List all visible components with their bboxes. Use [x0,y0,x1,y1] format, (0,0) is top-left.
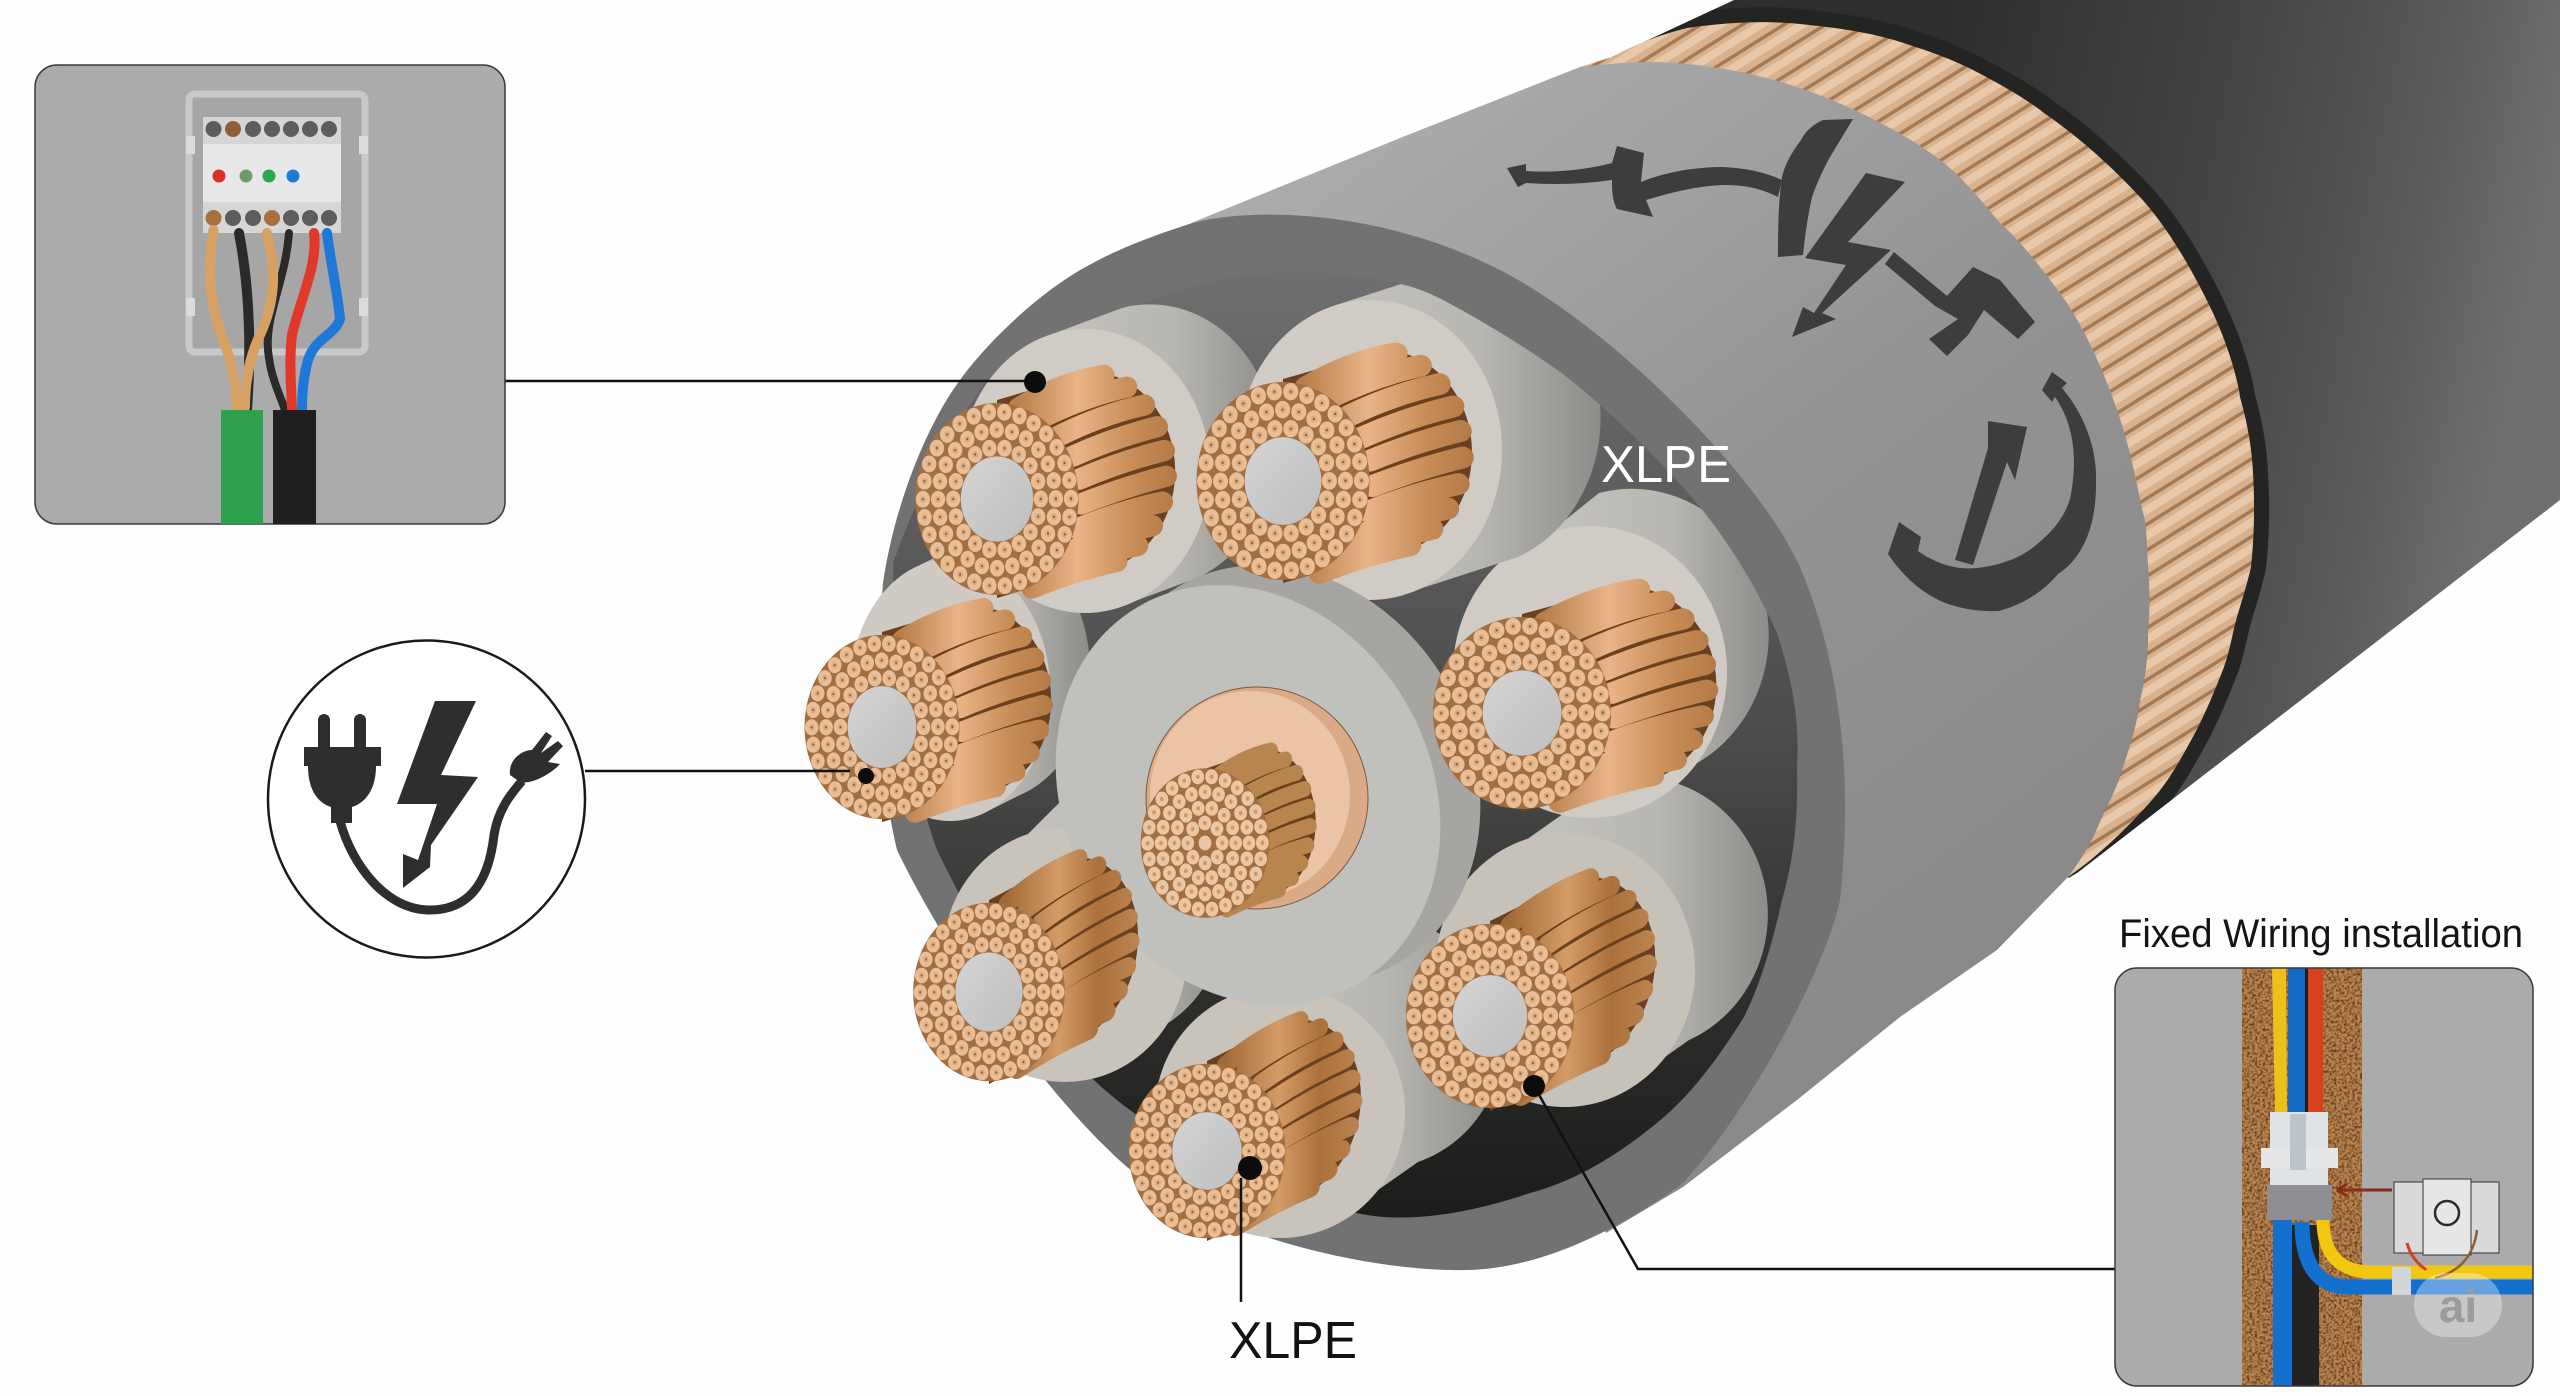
vertical wires bottom [2273,1220,2540,1390]
conductor: lower right [1406,864,1655,1111]
watermark text: ai [2439,1280,2477,1332]
icon: right mark [1885,252,2035,356]
insulation: right [1453,489,1769,818]
leader line: terminal panel to conductor [505,371,1046,393]
XLPE insulation cylinders [850,268,1769,1238]
label: XLPE below cable: XLPE [1229,1312,1357,1370]
watermark blob [2414,1273,2502,1337]
copper wire armour band [1580,22,2254,877]
vertical wires top [2272,968,2323,1112]
conductor: left [804,605,1051,822]
insulation: lower left [948,802,1202,1082]
conductor: right [1433,586,1716,812]
leader line: plug icon to conductor [585,768,874,784]
conductor: lower left [913,844,1138,1084]
caption: Fixed Wiring installation: Fixed Wiring installation [2119,912,2523,956]
coloured wires [210,230,340,410]
icon: cord [340,781,522,910]
icon: plug and lightning in circle [268,640,585,958]
icon: large plug [304,714,381,823]
icon: lightning bolt [397,701,478,888]
junction device [2394,1179,2499,1278]
conductor: upper left [915,372,1175,598]
wire connector [2261,1112,2338,1220]
leader line: wiring panel to conductor [1523,1075,2115,1269]
insulation: bottom [1158,932,1484,1238]
icon: small plug [510,732,563,783]
sheath front ring [879,215,1845,1270]
terminal enclosure frame [186,94,368,352]
conductor: upper right [1196,350,1472,583]
icon: wavy arrow [1507,146,1782,217]
insulation: centre [1056,566,1480,998]
insulation: upper right [1238,268,1601,600]
small red arrow [2337,1184,2392,1196]
sheath printed symbols [1507,119,2096,611]
cork wall strip [2242,968,2362,1386]
central copper conductor [1141,748,1316,918]
icon: arrow inside arc [1955,421,2027,565]
panel: terminal box [35,65,505,530]
cable stubs [221,410,316,530]
icon: crescent mark [1778,119,1853,257]
icon: lightning bolt [1792,173,1905,337]
insulation: left [858,558,1089,821]
insulation: upper left [960,304,1275,613]
icon: curved arc with arrow [1888,372,2096,611]
conductor: bottom [1129,1007,1361,1241]
leader line: XLPE label to conductor [1238,1156,1262,1302]
central conductor collar [1146,687,1368,909]
cable cavity [893,272,1798,1218]
terminal block [203,117,341,233]
insulation: lower right [1435,777,1768,1107]
grey inner sheath body [1093,62,2150,1233]
label: XLPE on sheath: XLPE [1601,436,1731,494]
black outer jacket [1612,0,2560,873]
cable clip [2392,1267,2411,1295]
panel: fixed wiring installation [2115,968,2540,1390]
cable cutaway illustration [804,0,2560,1270]
